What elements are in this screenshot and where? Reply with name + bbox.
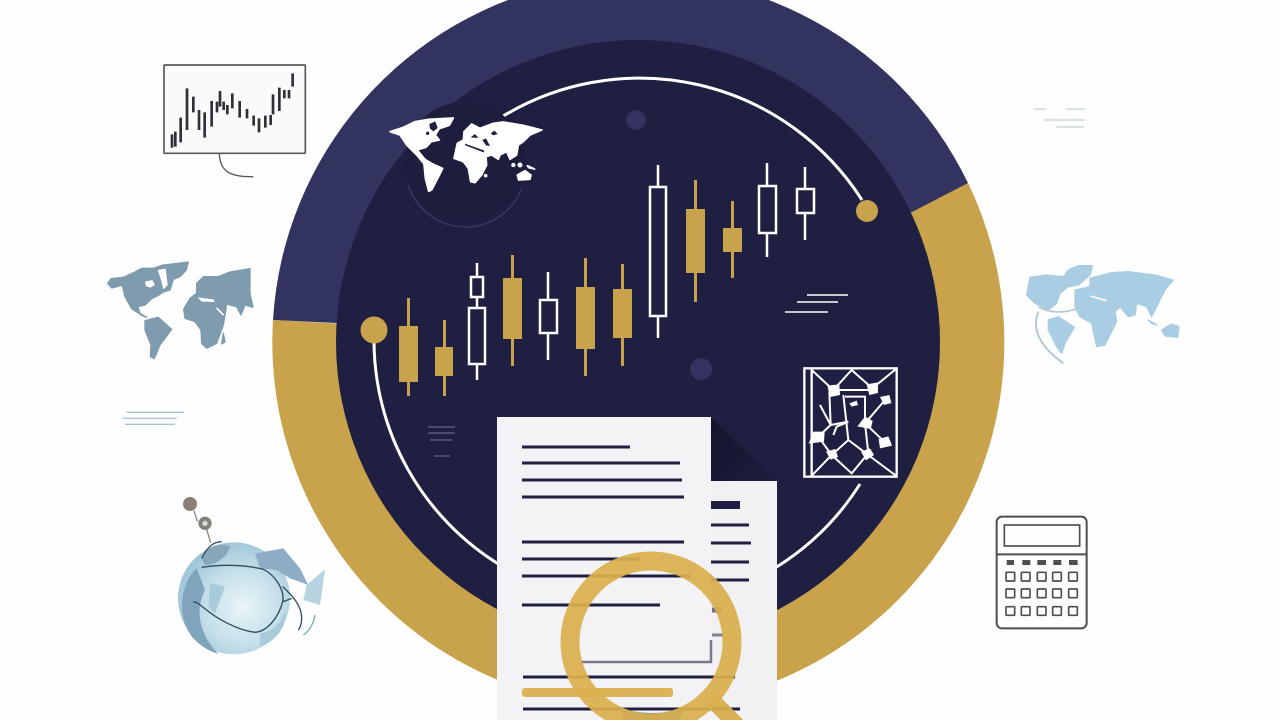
back page: [705, 481, 777, 720]
text lines on front page: [522, 447, 740, 709]
icon: calculator: [997, 517, 1087, 628]
gold candles: [399, 180, 742, 396]
icon: grey world map with caption lines: [108, 262, 253, 424]
document with magnifier: [497, 417, 777, 720]
gold outer ring segment: [272, 183, 1004, 708]
icon: candlestick chart card: [164, 65, 305, 177]
small annotation lines right: [785, 295, 848, 312]
shadow behind document: [711, 417, 778, 482]
icon: globe with pins: [178, 497, 325, 654]
navy ring segment: [273, 0, 968, 340]
top right faint lines: [1034, 109, 1085, 127]
circular white arc with gold end dots: [360, 78, 878, 568]
front page: [497, 417, 711, 720]
caption lines: [122, 412, 184, 424]
magnifier ring and handle: [570, 561, 738, 720]
icon: white world map on dark disc: [390, 102, 542, 227]
decorative dots: [626, 110, 712, 380]
small annotation lines left: [428, 427, 455, 456]
text lines on back page: [711, 505, 751, 580]
blue reflection in lens: [620, 708, 685, 720]
inner dark circle: [336, 40, 940, 644]
highlighted gold bar: [522, 688, 673, 697]
icon: network map: [804, 368, 897, 477]
candlestick chart: [399, 163, 814, 396]
white candles: [469, 163, 814, 380]
icon: light blue world map: [1027, 266, 1179, 363]
